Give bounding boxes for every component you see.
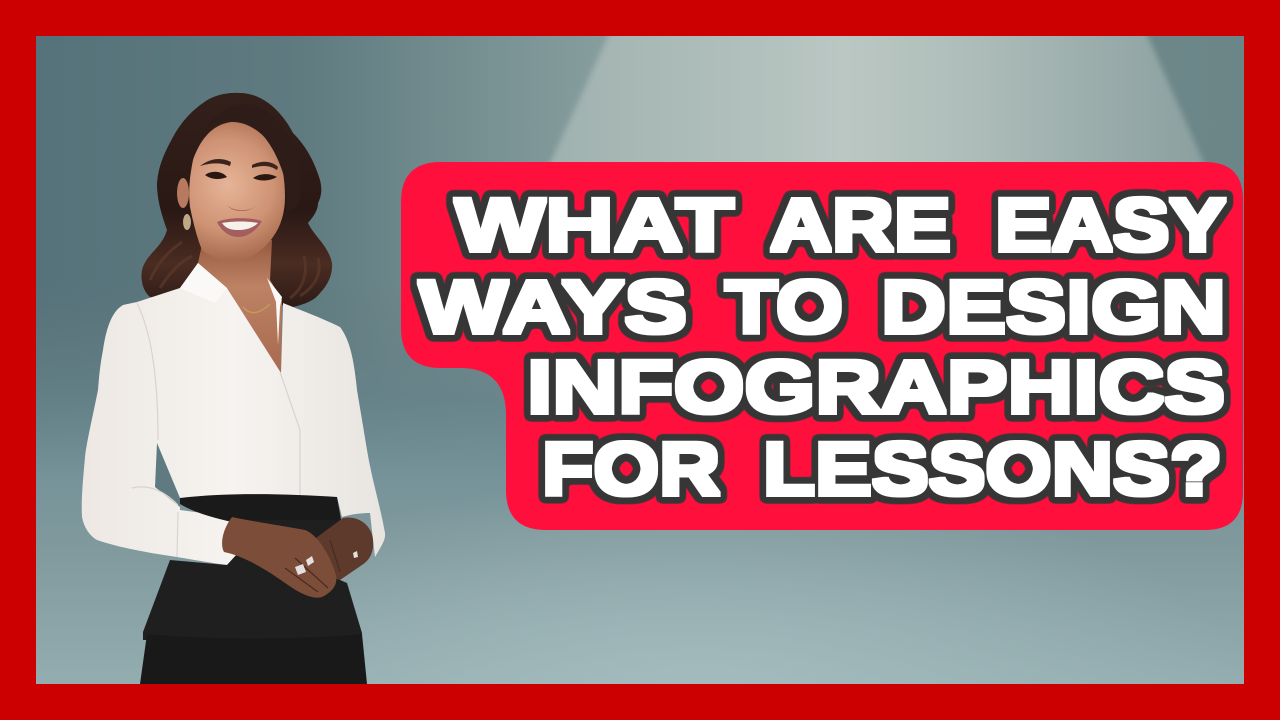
eyebrows [200,159,278,170]
ear [177,178,189,208]
right hand [316,517,373,580]
title text: LESSONS? [763,428,1222,511]
skirt [140,634,367,684]
nose shadow [227,205,257,211]
left hand and fingers [222,517,336,598]
face [189,122,285,262]
waistband [180,494,342,525]
left arm gap [155,443,180,507]
title text: INFOGRAPHICS [527,346,1225,429]
title text: EASY [995,184,1226,267]
neck and chest [198,240,282,373]
title text: WAYS [419,266,687,349]
earring [183,214,191,230]
title text: FOR [542,428,720,511]
peplum [143,520,362,640]
hair highlights [150,242,319,298]
title text: TO [725,266,843,349]
hair back [141,93,332,307]
rings [295,551,358,575]
blouse body and arms [82,263,385,565]
finger shadows [285,540,340,592]
title text: WHAT [455,184,734,267]
hair front sweep [205,104,301,214]
title text: DESIGN [881,266,1226,349]
woman presenter illustration [82,93,385,684]
red frame top edge over light [0,0,1280,36]
eyes [205,172,277,181]
collar left [180,263,227,303]
red title panel [401,162,1243,530]
title text [419,184,1226,511]
teeth [222,222,258,230]
collar right [267,278,282,345]
blouse seams [132,303,300,557]
necklace [243,304,270,313]
title text: ARE [770,184,951,267]
smile [217,218,262,237]
